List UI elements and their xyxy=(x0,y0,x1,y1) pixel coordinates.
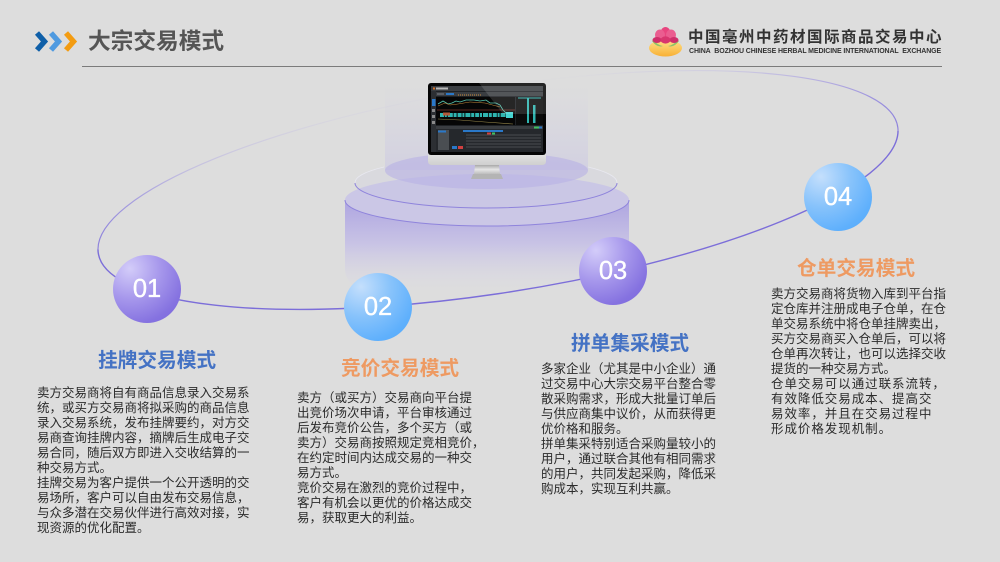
text block xyxy=(297,390,485,525)
heading: 仓单交易模式 xyxy=(797,258,915,280)
text block xyxy=(541,362,716,496)
logo name: 中国亳州中药材国际商品交易中心 xyxy=(688,29,943,46)
text block: 提货的一种交易方式。 xyxy=(771,362,896,376)
header xyxy=(35,27,943,56)
text block: 有效降低交易成本、提高交 xyxy=(771,392,932,406)
text block: 录入交易系统，发布挂牌要约，对方交 xyxy=(37,416,250,430)
text block: 易商查询挂牌内容，摘牌后生成电子交 xyxy=(37,431,250,445)
text block: 在约定时间内达成交易的一种交 xyxy=(297,451,472,465)
text block: 竞价交易在激烈的竞价过程中， xyxy=(297,481,472,495)
text block: 定仓库并注册成电子仓单，在仓 xyxy=(771,302,946,316)
logo xyxy=(649,27,943,56)
text block: 仓单交易可以通过联系流转， xyxy=(771,377,946,391)
upper light column xyxy=(385,85,588,189)
text block: 后发布竞价公告，多个买方（或 xyxy=(297,421,472,435)
node 03: 03 xyxy=(599,257,627,285)
node 03 xyxy=(579,237,647,305)
text block: 卖方交易商将货物入库到平台指 xyxy=(771,286,946,300)
icon: lotus logo xyxy=(649,27,682,56)
text block: 的用户，共同发起采购，降低采 xyxy=(541,467,716,481)
text block: 卖方交易商将自有商品信息录入交易系 xyxy=(37,386,250,400)
heading: 拼单集采模式 xyxy=(571,333,689,355)
text block: 形成价格发现机制。 xyxy=(771,422,892,436)
text block: 客户有机会以更优的价格达成交 xyxy=(297,496,472,510)
text block: 单交易系统中将仓单挂牌卖出， xyxy=(771,317,946,331)
text block: 统，或买方交易商将拟采购的商品信息 xyxy=(37,401,250,415)
text block: 卖方）交易商按照规定竞相竞价， xyxy=(297,436,485,450)
text block: 挂牌交易为客户提供一个公开透明的交 xyxy=(37,476,250,490)
text block: 优价格和服务。 xyxy=(541,422,629,436)
text block: 卖方（或买方）交易商向平台提 xyxy=(297,390,472,404)
node 02 xyxy=(344,273,412,341)
text block: 易场所，客户可以自由发布交易信息， xyxy=(37,491,250,505)
text block: 购成本，实现互利共赢。 xyxy=(541,482,679,496)
text block: 拼单集采特别适合采购量较小的 xyxy=(541,437,716,451)
node 01: 01 xyxy=(133,275,161,303)
text block: 易合同，随后双方即进入交收结算的一 xyxy=(37,446,250,460)
panel: 竞价交易模式 xyxy=(297,358,485,525)
text block xyxy=(37,386,250,535)
heading: 竞价交易模式 xyxy=(341,358,459,380)
node 04: 04 xyxy=(824,183,852,211)
orbit ellipse xyxy=(98,71,898,309)
text block: 用户，通过联合其他有相同需求 xyxy=(541,452,716,466)
text block: 易，获取更大的利益。 xyxy=(297,511,422,525)
text block: 与众多潜在交易伙伴进行高效对接，实 xyxy=(37,506,250,520)
text block xyxy=(771,286,946,436)
node 01 xyxy=(113,255,181,323)
text block: 易效率，并且在交易过程中 xyxy=(771,407,932,421)
monitor xyxy=(428,83,546,179)
text block: 易方式。 xyxy=(297,466,347,480)
text block: 现资源的优化配置。 xyxy=(37,521,150,535)
text block: 多家企业（尤其是中小企业）通 xyxy=(541,362,716,376)
node 02: 02 xyxy=(364,293,392,321)
text block: 散采购需求，形成大批量订单后 xyxy=(541,392,716,406)
text block: 买方交易商买入仓单后，可以将 xyxy=(771,332,946,346)
panel: 拼单集采模式 xyxy=(541,332,716,496)
panel: 挂牌交易模式 xyxy=(37,350,250,535)
icon: triple chevrons xyxy=(35,31,77,52)
text block: 与供应商集中议价，从而获得更 xyxy=(541,407,716,421)
thin ring xyxy=(355,158,617,208)
text block: 过交易中心大宗交易平台整合零 xyxy=(541,377,716,391)
panel: 仓单交易模式 xyxy=(771,258,946,436)
heading: 挂牌交易模式 xyxy=(98,350,216,372)
node 04 xyxy=(804,163,872,231)
title: 大宗交易模式 xyxy=(88,28,224,54)
text block: 出竞价场次申请，平台审核通过 xyxy=(297,406,472,420)
text block: 仓单再次转让，也可以选择交收 xyxy=(771,347,946,361)
logo english name: CHINA BOZHOU CHINESE HERBAL MEDICINE INTERNATIONAL EXCHANGE xyxy=(689,48,941,55)
cylinder platform xyxy=(345,174,629,290)
text block: 种交易方式。 xyxy=(37,461,112,475)
